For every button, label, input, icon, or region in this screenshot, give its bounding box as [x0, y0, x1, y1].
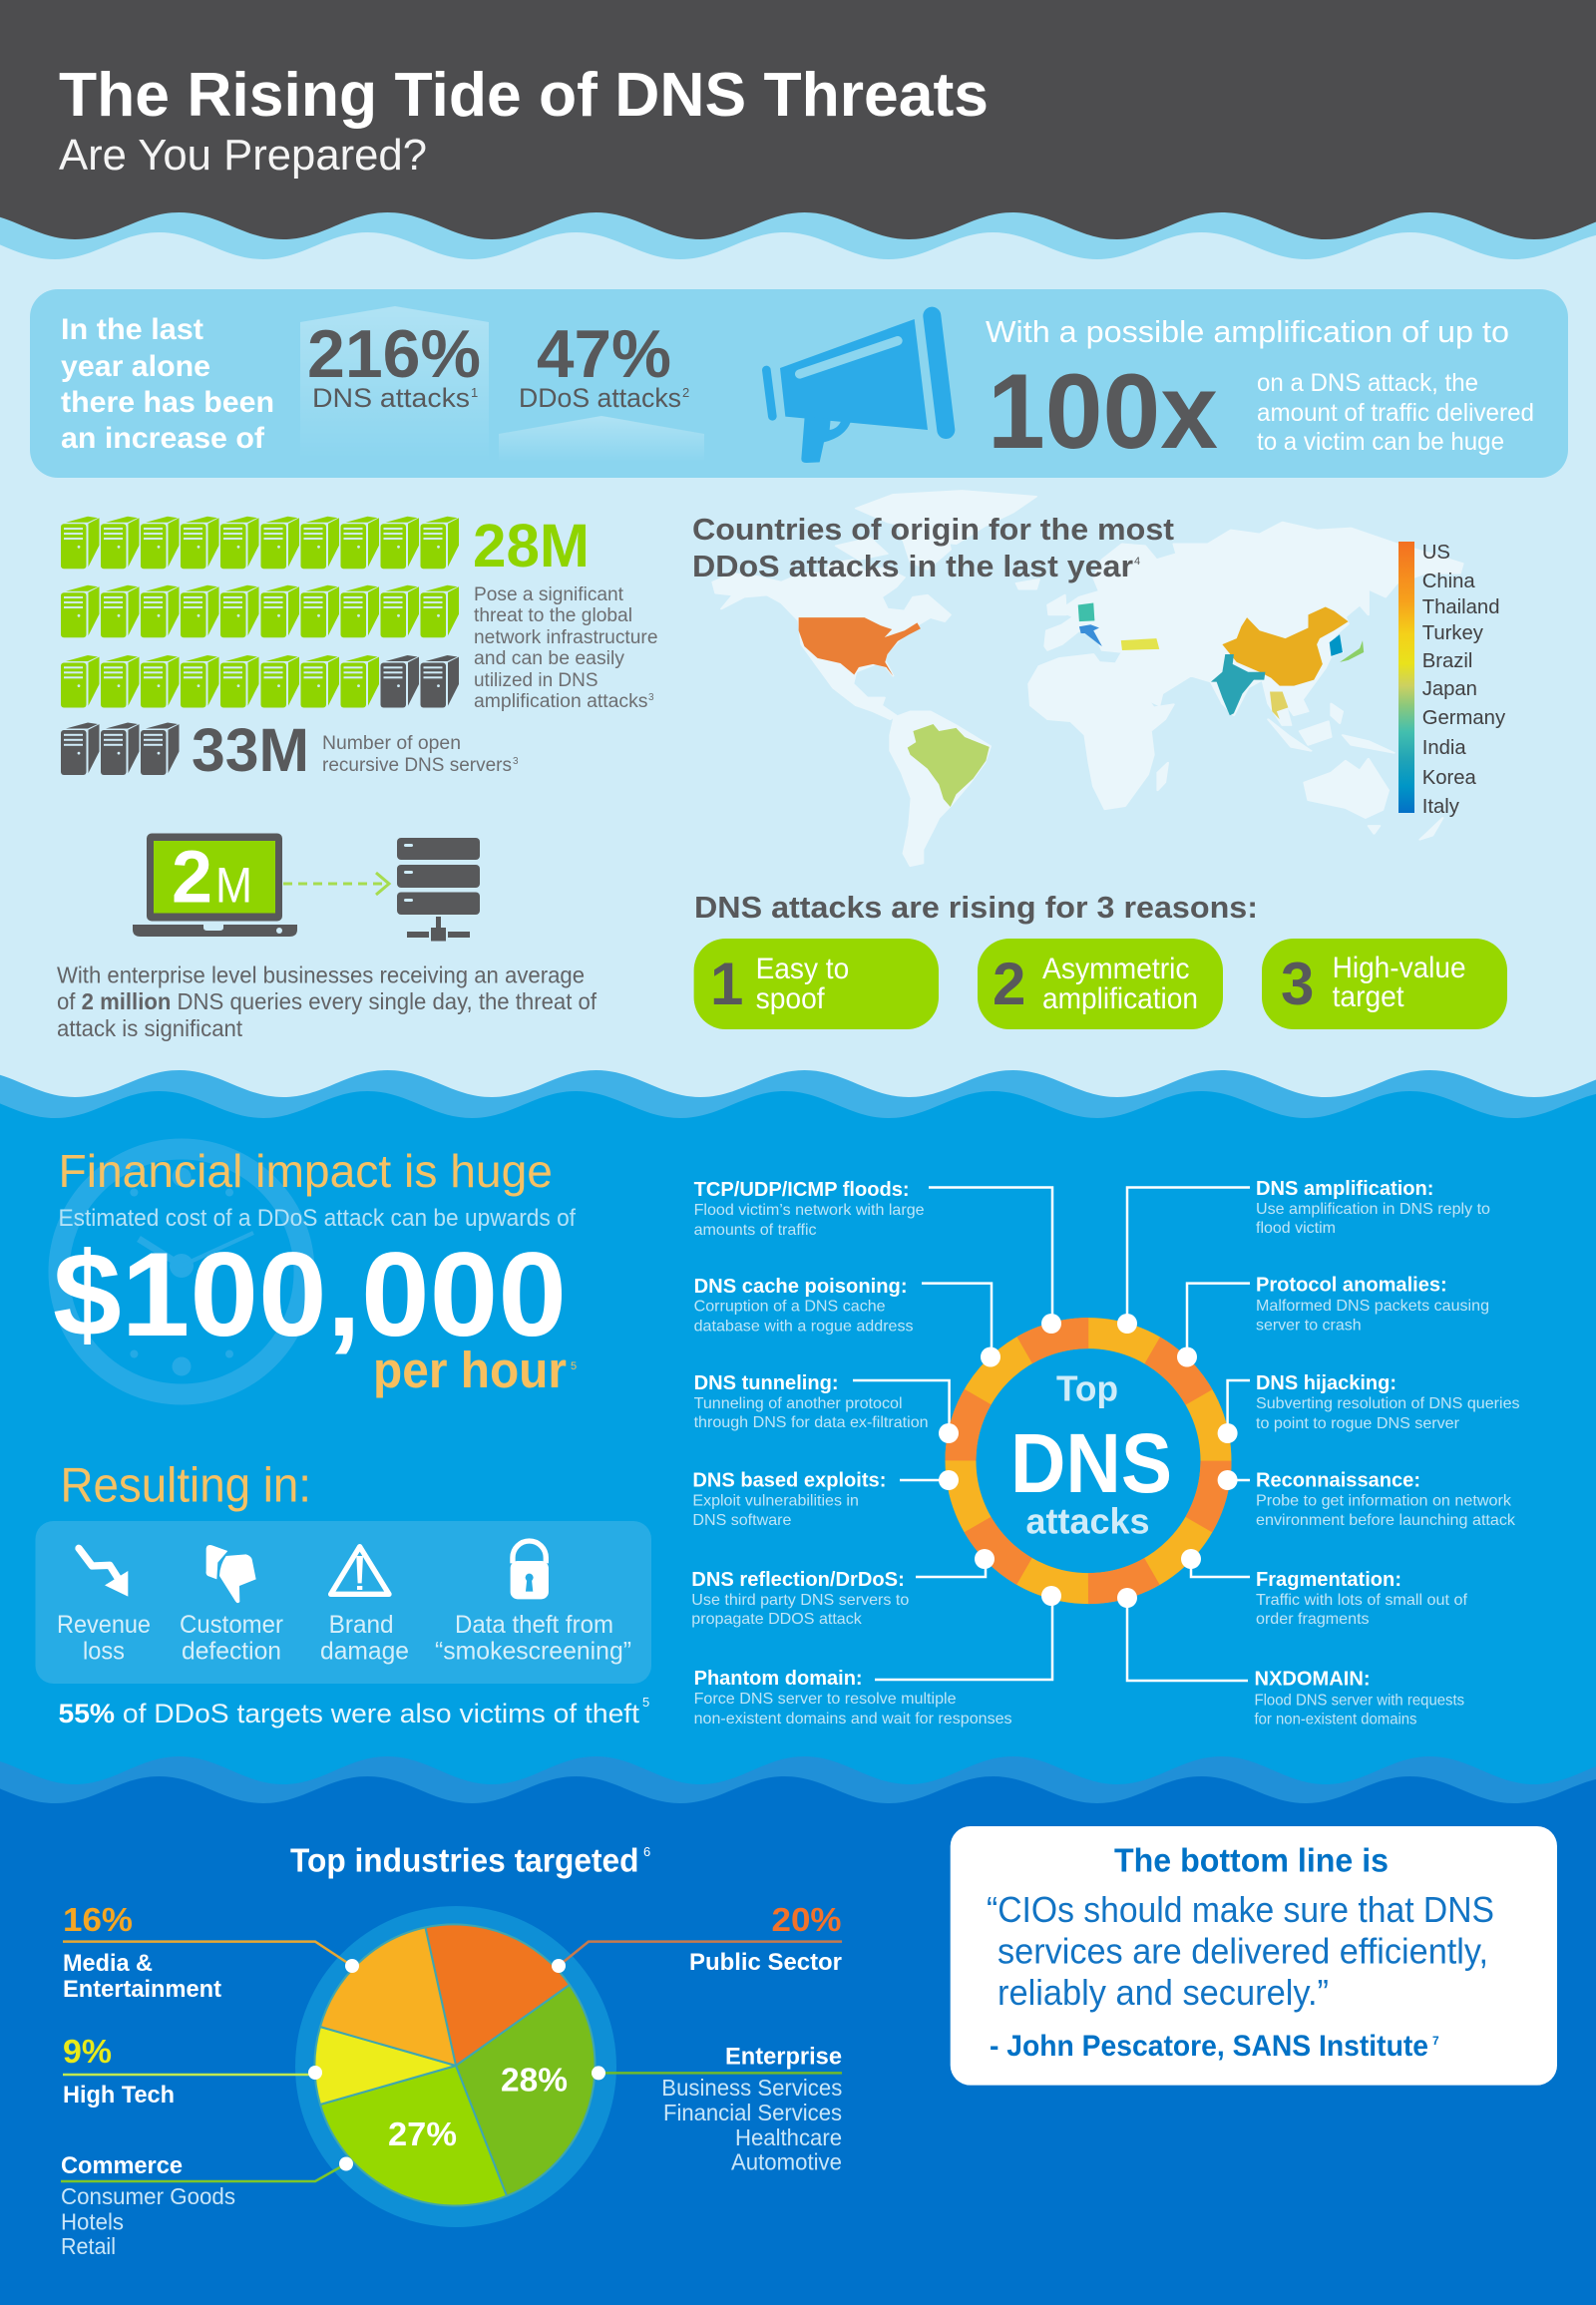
28M description: utilized in DNS — [474, 670, 598, 691]
attack: Reconnaissance: Reconnaissance: — [1256, 1470, 1420, 1492]
stat: 216% DNS attacks: 1 — [471, 385, 478, 400]
quote text: “CIOs should make sure that DNS — [987, 1889, 1494, 1930]
consequence labels: Revenue — [57, 1611, 151, 1639]
icon: laptop with 2M — [133, 834, 297, 937]
33M description: 3 — [513, 756, 519, 767]
attack: TCP/UDP/ICMP floods: amounts of traffic — [694, 1222, 817, 1239]
attack: TCP/UDP/ICMP floods: TCP/UDP/ICMP floods: — [694, 1179, 910, 1201]
increase intro text: an increase of — [61, 422, 265, 455]
map legend — [1398, 542, 1506, 818]
icon: DNS server stack — [397, 838, 480, 942]
28M description: 3 — [648, 692, 654, 703]
attack: Protocol anomalies: server to crash — [1256, 1318, 1362, 1335]
chart: industries pie — [295, 1906, 616, 2227]
28M description: and can be easily — [474, 648, 625, 669]
icon: warning triangle — [331, 1547, 389, 1594]
attack: Fragmentation: Fragmentation: — [1256, 1569, 1401, 1591]
connector lines — [853, 1187, 1250, 1681]
amplification description: on a DNS attack, the — [1257, 369, 1478, 397]
attack: DNS amplification — [1256, 1178, 1490, 1237]
28M description: threat to the global — [474, 605, 632, 626]
attack: DNS cache poisoning: Corruption of a DNS cache — [694, 1299, 886, 1316]
callout: enterprise: Financial Services — [663, 2100, 842, 2125]
panel: increase statistics — [30, 289, 1568, 478]
amplification description: amount of traffic delivered — [1257, 399, 1534, 427]
amplification heading: With a possible amplification of up to — [986, 314, 1509, 349]
ring segments — [961, 1334, 1216, 1589]
map legend: Germany — [1422, 707, 1506, 729]
attack: DNS reflection/DrDoS: Use third party DNS servers to — [691, 1592, 909, 1609]
stat: per hour: per hour — [373, 1342, 567, 1398]
attack: DNS based exploits: Exploit vulnerabilities in — [692, 1493, 859, 1510]
callout: media & entertainment: Media & — [63, 1950, 153, 1977]
stat: 47% DDoS attacks: DDoS attacks — [519, 383, 681, 413]
attack: DNS cache poisoning: database with a rogue address — [694, 1319, 914, 1335]
attack: Fragmentation: order fragments — [1256, 1611, 1370, 1628]
reason 3: 3 — [1281, 951, 1314, 1017]
map legend: Italy — [1422, 796, 1460, 818]
enterprise queries text — [57, 962, 598, 1041]
map heading: DDoS attacks in the last year — [692, 549, 1133, 583]
attack: DNS tunneling: through DNS for data ex-filtration — [694, 1414, 929, 1431]
attack: Phantom domain: Force DNS server to resolve multiple — [694, 1691, 957, 1708]
reason 1: 1 — [710, 951, 743, 1017]
server icons: row 2 — [61, 585, 459, 637]
attack: DNS hijacking: to point to rogue DNS server — [1256, 1415, 1460, 1432]
ring centre text: attacks — [1025, 1501, 1149, 1542]
icon: clock watermark — [59, 1149, 304, 1394]
attack: DNS amplification: flood victim — [1256, 1220, 1336, 1237]
heading: resulting in: Resulting in: — [60, 1458, 311, 1512]
33M description — [322, 733, 519, 776]
increase intro text: there has been — [61, 386, 274, 419]
heading: top industries targeted: 6 — [643, 1844, 650, 1859]
stat: 47% DDoS attacks: 47% — [537, 316, 671, 392]
wave: bottom band — [0, 1756, 1596, 2305]
28M description: network infrastructure — [474, 627, 658, 648]
chart: top DNS attacks ring — [853, 1187, 1250, 1681]
33M description: Number of open — [322, 733, 461, 754]
callout: enterprise: Enterprise — [725, 2044, 842, 2071]
callout: commerce: Consumer Goods — [61, 2183, 235, 2209]
reason 1: spoof — [756, 982, 825, 1015]
quote text: services are delivered efficiently, — [998, 1931, 1488, 1972]
attack: Phantom domain: Phantom domain: — [694, 1668, 863, 1690]
icon: laptop with 2M: M — [215, 858, 252, 914]
attack: DNS based exploits: DNS software — [692, 1512, 791, 1529]
stat: 47% DDoS attacks — [519, 316, 689, 413]
attack: Reconnaissance: environment before launching attack — [1256, 1512, 1516, 1529]
increase intro text: year alone — [61, 350, 210, 383]
server icons: row 1 — [61, 517, 459, 569]
server icons: row 4 — [61, 722, 180, 775]
attack: Fragmentation: Traffic with lots of small out of — [1256, 1592, 1468, 1609]
enterprise queries text: of 2 million DNS queries every single day, the threat of — [57, 988, 598, 1014]
reason 3: target — [1333, 980, 1404, 1013]
consequence labels: loss — [83, 1638, 125, 1666]
consequence labels: Customer — [180, 1611, 283, 1639]
heading: top industries targeted: Top industries targeted — [290, 1841, 638, 1879]
subtitle: Are You Prepared? — [59, 131, 427, 180]
quote attribution: - John Pescatore, SANS Institute — [990, 2030, 1428, 2063]
attack: NXDOMAIN — [1255, 1669, 1464, 1729]
consequence labels: Data theft from — [455, 1611, 613, 1639]
consequence labels: damage — [320, 1638, 409, 1666]
callout: enterprise: Automotive — [731, 2149, 842, 2175]
callout: commerce — [61, 2152, 353, 2259]
wave: mid light band — [0, 1070, 1596, 2305]
callout: high tech — [63, 2033, 322, 2109]
quote attribution: 7 — [1432, 2034, 1439, 2048]
enterprise queries text: With enterprise level businesses receiving an average — [57, 962, 585, 988]
icon: megaphone — [766, 316, 946, 463]
stat: 216% DNS attacks: 216% — [307, 316, 481, 392]
33M description: recursive DNS servers — [322, 755, 512, 776]
attack: DNS tunneling: DNS tunneling: — [694, 1372, 839, 1394]
reason 2 — [978, 939, 1223, 1029]
map: world with coloured origin countries — [713, 491, 1462, 866]
stat: 33M: 33M — [192, 716, 309, 784]
attack: Phantom domain — [694, 1668, 1012, 1728]
map legend: Korea — [1422, 767, 1477, 789]
map legend: India — [1422, 737, 1466, 759]
panel: quote — [951, 1826, 1557, 2086]
attack: Phantom domain: non-existent domains and wait for responses — [694, 1711, 1012, 1728]
pie label: 28%: 28% — [501, 2062, 568, 2099]
attack: TCP/UDP/ICMP floods — [694, 1179, 925, 1239]
callout: public sector: Public Sector — [689, 1949, 842, 1976]
callout: media & entertainment — [63, 1901, 359, 2003]
consequence labels: Brand — [329, 1611, 394, 1639]
callout: media & entertainment: Entertainment — [63, 1976, 221, 2003]
28M description: Pose a significant — [474, 584, 624, 605]
attack: Protocol anomalies — [1256, 1275, 1489, 1335]
reason 2: 2 — [993, 951, 1025, 1017]
ring centre text: DNS — [1010, 1416, 1172, 1510]
callout: media & entertainment: 16% — [63, 1901, 133, 1938]
attack: DNS tunneling — [694, 1372, 929, 1431]
header dark wave — [0, 0, 1596, 239]
callout: high tech: 9% — [63, 2033, 112, 2070]
server icons: row 3 — [61, 655, 459, 708]
attack: Reconnaissance — [1256, 1470, 1516, 1529]
callout: commerce: Hotels — [61, 2208, 124, 2234]
quote text: reliably and securely.” — [998, 1972, 1329, 2013]
callout: commerce: Retail — [61, 2233, 116, 2259]
pie label: 27%: 27% — [388, 2115, 457, 2152]
stat: 55% victims of theft: 5 — [642, 1695, 649, 1710]
reason 2: Asymmetric — [1042, 953, 1189, 985]
arrow: queries to server — [283, 873, 389, 895]
amplification description — [1257, 369, 1534, 456]
increase intro text: In the last — [61, 313, 203, 346]
map heading: 4 — [1134, 556, 1140, 568]
connector dots — [939, 1314, 1238, 1608]
attack: Fragmentation — [1256, 1569, 1468, 1628]
section: bottom background — [0, 1776, 1596, 2305]
increase intro text — [61, 313, 274, 455]
callout: enterprise — [592, 2044, 842, 2175]
attack: DNS hijacking — [1256, 1372, 1520, 1432]
attack: DNS amplification: DNS amplification: — [1256, 1178, 1434, 1200]
attack: NXDOMAIN: Flood DNS server with requests — [1255, 1692, 1464, 1710]
attack: DNS hijacking: Subverting resolution of DNS queries — [1256, 1395, 1520, 1412]
consequence labels — [57, 1611, 631, 1666]
attack: DNS based exploits — [692, 1470, 886, 1529]
attack: DNS hijacking: DNS hijacking: — [1256, 1372, 1396, 1394]
icon: falling arrow — [79, 1548, 128, 1597]
enterprise queries text: attack is significant — [57, 1015, 243, 1041]
map legend: Turkey — [1422, 622, 1484, 644]
attack: DNS amplification: Use amplification in DNS reply to — [1256, 1201, 1490, 1218]
attack: DNS reflection/DrDoS: propagate DDOS attack — [691, 1611, 863, 1628]
quote text — [987, 1889, 1494, 2013]
ring centre text — [1010, 1368, 1172, 1542]
map heading — [692, 512, 1174, 583]
attack: Protocol anomalies: Malformed DNS packets causing — [1256, 1298, 1489, 1315]
amplification description: to a victim can be huge — [1257, 428, 1504, 456]
consequence labels: defection — [182, 1638, 281, 1666]
map legend: China — [1422, 571, 1475, 592]
reason 1 — [694, 939, 939, 1029]
map legend: Thailand — [1422, 596, 1500, 618]
attack: NXDOMAIN: NXDOMAIN: — [1255, 1669, 1371, 1691]
reason 2: amplification — [1042, 982, 1198, 1015]
attack: Protocol anomalies: Protocol anomalies: — [1256, 1275, 1447, 1297]
attack: DNS cache poisoning: DNS cache poisoning: — [694, 1276, 908, 1298]
callout: public sector: 20% — [772, 1901, 842, 1938]
stat: $100,000: $100,000 — [53, 1228, 567, 1361]
attack: NXDOMAIN: for non-existent domains — [1255, 1712, 1416, 1729]
ring centre text: Top — [1056, 1368, 1118, 1408]
attack: DNS reflection/DrDoS — [691, 1569, 909, 1628]
attack: DNS based exploits: DNS based exploits: — [692, 1470, 886, 1492]
stat: 28M: 28M — [473, 512, 590, 579]
bar: 216% — [300, 306, 489, 462]
map legend: Japan — [1422, 678, 1477, 700]
callout: enterprise: Business Services — [661, 2075, 842, 2101]
attack: DNS reflection/DrDoS: DNS reflection/DrDoS: — [691, 1569, 905, 1591]
heading: financial impact: Financial impact is huge — [58, 1145, 553, 1197]
reason 3: High-value — [1333, 952, 1466, 984]
attack: DNS tunneling: Tunneling of another protocol — [694, 1395, 903, 1412]
stat: 100x: 100x — [988, 351, 1218, 471]
consequence labels: “smokescreening” — [435, 1638, 631, 1666]
stat: 55% victims of theft: 55% of DDoS targets were also victims of theft — [58, 1699, 640, 1729]
map legend: Brazil — [1422, 650, 1472, 672]
callout: public sector — [552, 1901, 842, 1976]
attack: DNS cache poisoning — [694, 1276, 914, 1335]
title: The Rising Tide of DNS Threats — [59, 61, 989, 130]
reason 3 — [1262, 939, 1507, 1029]
callout: high tech: High Tech — [63, 2082, 175, 2109]
section: financial background — [0, 1091, 1596, 2305]
bar: 47% — [499, 416, 704, 462]
map heading: Countries of origin for the most — [692, 512, 1174, 547]
reason 1: Easy to — [756, 953, 849, 985]
quote heading: The bottom line is — [1114, 1841, 1389, 1879]
28M description — [474, 584, 658, 712]
map legend: US — [1422, 542, 1450, 564]
wave: header light band — [0, 0, 1596, 259]
panel: consequences — [36, 1521, 651, 1684]
stat: 47% DDoS attacks: 2 — [682, 385, 689, 400]
callout: enterprise: Healthcare — [735, 2124, 842, 2150]
icon: padlock — [511, 1541, 549, 1599]
financial subheading: Estimated cost of a DDoS attack can be upwards of — [58, 1205, 576, 1232]
stat: per hour: 5 — [571, 1360, 577, 1372]
icon: thumbs down — [206, 1545, 256, 1603]
28M description: amplification attacks — [474, 691, 648, 712]
attack: TCP/UDP/ICMP floods: Flood victim’s network with large — [694, 1202, 925, 1219]
heading: 3 reasons: DNS attacks are rising for 3 reasons: — [694, 890, 1258, 925]
attack: Reconnaissance: Probe to get information on network — [1256, 1493, 1512, 1510]
callout: commerce: Commerce — [61, 2152, 183, 2179]
stat: 216% DNS attacks: DNS attacks — [312, 383, 470, 413]
icon: laptop with 2M: 2 — [172, 836, 212, 918]
